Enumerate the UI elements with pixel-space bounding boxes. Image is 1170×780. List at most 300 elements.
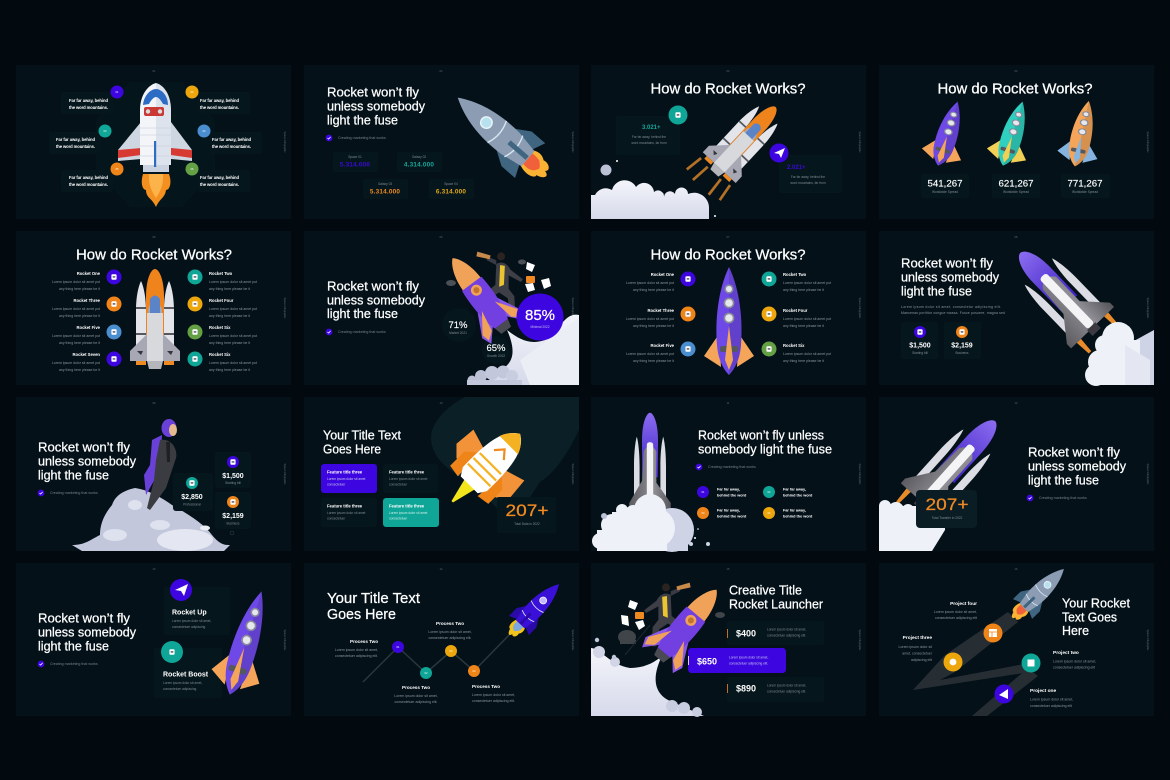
checklist item xyxy=(326,135,386,141)
stat card: 207+ xyxy=(916,490,977,528)
stat cards: Business xyxy=(227,522,240,526)
project labels: Lorem ipsum dolor sit amet, xyxy=(1053,660,1096,664)
stat card: 207+: Total Data in 2022 xyxy=(514,522,540,526)
illustration: man on rocket xyxy=(433,244,551,346)
panel: slide 9 astronaut on cloud xyxy=(16,397,291,551)
price row: $650: Lorem ipsum dolor sit amet, xyxy=(729,656,768,660)
title: Rocket Launcher xyxy=(729,596,824,612)
project labels: Lorem ipsum dolor sit xyxy=(899,645,932,649)
body text xyxy=(901,305,1005,315)
stat cards xyxy=(173,452,251,535)
number badges: 01 xyxy=(116,90,119,94)
stat cards xyxy=(921,174,1110,198)
process nodes: 01 xyxy=(397,645,400,649)
numbered list: Far far away, xyxy=(717,488,740,492)
panel: slide 10 feature cards and orange rocket xyxy=(304,397,579,551)
stat cards: $2,159 xyxy=(222,513,244,520)
info cards: the word mountains. xyxy=(56,144,95,149)
panel: slide 9 astronaut on cloud: Space Infographic xyxy=(283,464,287,485)
stat: 71%: Market 2021 xyxy=(449,331,467,335)
stat cards: Space 04 xyxy=(444,182,458,186)
stat cards: Business xyxy=(956,351,969,355)
price row: $890: $890 xyxy=(736,684,756,694)
panel: slide 13 rocket up and rocket boost xyxy=(16,563,291,716)
card: rocket boost: Lorem ipsum dolor sit amet, xyxy=(163,681,202,685)
title: Rocket won’t fly xyxy=(38,440,130,454)
number badges: 03 xyxy=(104,129,107,133)
number badges: 02 xyxy=(191,90,194,94)
info cards: the word mountains. xyxy=(69,182,108,187)
illustration: grey rocket xyxy=(443,80,562,193)
numbered list: behind the word xyxy=(783,514,813,518)
stat: 71%: 71% xyxy=(448,320,468,331)
panel: slide 6 percentages with man on rocket xyxy=(304,231,579,385)
stat cards: $1,500 xyxy=(222,473,244,480)
title: Your Rocket xyxy=(1062,596,1130,610)
left feature list xyxy=(626,272,696,363)
title: Goes Here xyxy=(323,442,381,456)
left feature list: Lorem ipsum dolor sit amet put xyxy=(52,280,100,284)
panel: slide 8 shuttle launch with stats xyxy=(879,231,1154,386)
process nodes xyxy=(392,641,480,679)
process nodes: 02 xyxy=(425,671,428,675)
stat cards: Galaxy 02 xyxy=(412,155,426,159)
panel: slide 5 shuttle parts list: 05 xyxy=(153,235,156,239)
price row: $400: consectetuer adipiscing elit. xyxy=(767,634,806,638)
price row: $650: consectetuer adipiscing elit. xyxy=(729,662,768,666)
card: rocket up: consectetuer adipiscing xyxy=(172,625,206,629)
process labels: consectetuer adipiscing elit. xyxy=(472,699,515,703)
info cards: Far far away, behind xyxy=(200,175,239,180)
panel: slide 1 shuttle overview: Space Infographic xyxy=(283,132,287,153)
stat cards: 5.314.000 xyxy=(340,162,370,168)
body text: Lorem ipsum dolor sit amet, consectetur adipiscing elit. xyxy=(901,305,1001,309)
left feature list: Lorem ipsum dolor sit amet put xyxy=(626,281,674,285)
title: How do Rocket Works? xyxy=(76,246,232,264)
stat cards: 541,267 xyxy=(928,178,962,190)
process labels: Process Two xyxy=(402,685,430,690)
checklist item xyxy=(326,329,386,335)
stat: 71% xyxy=(442,308,476,342)
stat cards: Professional xyxy=(183,502,201,506)
illustration: tilted shuttle xyxy=(684,92,792,203)
right feature list: Rocket Four xyxy=(209,298,234,303)
illustration: smoke cloud xyxy=(592,494,710,552)
title: light the fuse xyxy=(327,112,398,128)
project labels: Project two xyxy=(1053,650,1079,656)
stat cards: 4.314.000 xyxy=(404,162,434,168)
title: How do Rocket Works? xyxy=(938,80,1092,98)
stat cards: Starting bill xyxy=(912,351,928,355)
project labels: Project four xyxy=(950,601,977,607)
info cards: the word mountains. xyxy=(69,105,108,110)
stat cards: 6.314.000 xyxy=(436,188,466,196)
panel: slide 11 shuttle with numbered list: Space Infographic xyxy=(858,464,862,485)
panel: slide 15 pricing with rocket launcher: 15 xyxy=(727,567,730,571)
illustration: orange tank shuttle xyxy=(130,269,180,369)
panel: slide 8 shuttle launch with stats: 08 xyxy=(1015,235,1018,239)
stat: 85%: Minimal 2022 xyxy=(531,325,550,329)
right feature list: Lorem ipsum dolor sit amet put xyxy=(209,334,257,338)
title: Goes Here xyxy=(327,606,396,623)
title: Here xyxy=(1062,623,1089,638)
feature cards xyxy=(321,464,439,527)
feature cards: Lorem ipsum dolor sit amet xyxy=(389,511,428,515)
price row: $650: $650 xyxy=(697,656,717,666)
panel: slide 7 purple rocket list: 07 xyxy=(727,235,730,239)
illustration: upright purple shuttle xyxy=(629,413,671,523)
title: Rocket won’t fly xyxy=(901,256,993,270)
panel: slide 5 shuttle parts list xyxy=(16,231,291,385)
title: unless somebody xyxy=(901,270,999,284)
feature cards: Feature title three xyxy=(327,504,363,508)
numbered list: 02 xyxy=(768,490,771,494)
right feature list: Lorem ipsum dolor sit amet put xyxy=(783,352,831,356)
panel: slide 16 project roadmap xyxy=(879,559,1154,716)
info cards: Far far away, behind xyxy=(212,137,251,142)
title: Rocket won’t fly xyxy=(1028,444,1120,460)
left feature list: any thing here please be it xyxy=(59,368,100,372)
card: 2.021+: word mountains, far from xyxy=(790,181,826,185)
info cards: Far far away, behind xyxy=(69,175,108,180)
price row: $400: Lorem ipsum dolor sit amet, xyxy=(767,628,806,632)
project labels xyxy=(899,601,1096,708)
title: light the fuse xyxy=(901,284,972,298)
stat card: 207+ xyxy=(497,497,556,533)
panel: slide 6 percentages with man on rocket: Space Infographic xyxy=(571,298,575,319)
stat cards: Space 01 xyxy=(348,155,362,159)
process labels: Lorem ipsum dolor sit amet, xyxy=(472,693,515,697)
panel: slide 5 shuttle parts list: Space Infographic xyxy=(283,298,287,319)
right feature list: any thing here please be it xyxy=(783,359,824,363)
panel: slide 11 shuttle with numbered list: 11 xyxy=(727,401,730,405)
panel: slide 10 feature cards and orange rocket: Space Infographic xyxy=(571,464,575,485)
stat card: 207+: 207+ xyxy=(926,495,969,514)
card: rocket up: Lorem ipsum dolor sit amet, xyxy=(172,619,211,623)
title: Text Goes xyxy=(1062,610,1117,624)
left feature list: Rocket One xyxy=(77,271,101,276)
panel: slide 9 astronaut on cloud: 09 xyxy=(153,401,156,405)
right feature list: any thing here please be it xyxy=(783,288,824,292)
panel: slide 7 purple rocket list: Space Infographic xyxy=(858,298,862,319)
feature cards: Feature title three xyxy=(389,504,425,508)
illustration: smoke cloud xyxy=(1085,322,1154,386)
process labels: Lorem ipsum dolor sit amet, xyxy=(428,630,472,634)
left feature list: Rocket Seven xyxy=(73,352,100,357)
stat cards: Worldwide Spread xyxy=(1003,190,1029,194)
checklist item xyxy=(1027,495,1087,501)
right feature list xyxy=(762,272,831,363)
process labels: Process Two xyxy=(350,639,378,644)
left feature list xyxy=(52,270,122,372)
panel: slide 4 three rockets: 04 xyxy=(1015,69,1018,73)
left feature list: Rocket Three xyxy=(73,298,101,303)
panel: slide 4 three rockets: Space Infographic xyxy=(1146,132,1150,153)
title: light the fuse xyxy=(38,468,109,482)
project nodes xyxy=(944,624,1040,704)
stat cards: 5.314.000 xyxy=(370,188,400,196)
right feature list xyxy=(188,270,257,372)
stat cards xyxy=(901,322,981,359)
illustration: smoke trail xyxy=(467,315,579,385)
title: Creative Title xyxy=(729,582,802,598)
title: unless somebody xyxy=(38,624,136,640)
panel: slide 15 pricing with rocket launcher: Space Infographic xyxy=(858,630,862,651)
checklist item xyxy=(38,661,98,667)
process path xyxy=(363,632,512,682)
info cards: the word mountains. xyxy=(200,105,239,110)
card: 2.021+ xyxy=(770,144,842,193)
card: 2.021+: Far far away, behind the xyxy=(791,175,825,179)
panel: slide 16 project roadmap: Space Infographic xyxy=(1146,630,1150,651)
stat cards: Worldwide Spread xyxy=(932,190,958,194)
panel: slide 11 shuttle with numbered list xyxy=(591,397,866,552)
project labels: Project three xyxy=(903,635,932,641)
illustration: orange white rocket xyxy=(425,407,547,529)
feature cards: consectetuer xyxy=(327,516,346,520)
title: light the fuse xyxy=(327,306,398,321)
panel: slide 3 how rockets work: Space Infographic xyxy=(858,132,862,153)
right feature list: Lorem ipsum dolor sit amet put xyxy=(209,280,257,284)
numbered list: Far far away, xyxy=(717,508,740,512)
numbered list: Far far away, xyxy=(783,488,806,492)
illustration: smoke mound xyxy=(72,488,230,551)
right feature list: any thing here please be it xyxy=(209,314,250,318)
stat: 85% xyxy=(516,294,564,340)
right feature list: Rocket Six xyxy=(209,325,231,330)
stat cards: $2,850 xyxy=(181,494,203,501)
panel: slide 2 rocket title and stats: Space Infographic xyxy=(571,132,575,153)
feature cards: consectetuer xyxy=(389,516,408,520)
price row: $890: consectetuer adipiscing elit. xyxy=(767,690,806,694)
illustration: purple shuttle xyxy=(999,232,1125,360)
feature cards: Lorem ipsum dolor sit amet xyxy=(389,477,428,481)
process labels: Process Two xyxy=(436,621,464,626)
project labels: consectetuer adipiscing elit xyxy=(1030,704,1072,708)
illustration: blue rocket xyxy=(500,575,569,645)
project labels: Lorem ipsum dolor sit amet, xyxy=(934,610,977,614)
card: 2.021+: 2.021+ xyxy=(787,165,806,171)
title: light the fuse xyxy=(38,638,109,654)
right feature list: Rocket Six xyxy=(209,352,231,357)
number badges: 06 xyxy=(191,167,194,171)
number badges: 05 xyxy=(116,167,119,171)
stat cards: Galaxy 03 xyxy=(378,182,392,186)
illustration: orange rocket xyxy=(1055,97,1109,171)
panel: slide 13 rocket up and rocket boost: 13 xyxy=(153,567,156,571)
right feature list: Lorem ipsum dolor sit amet put xyxy=(783,281,831,285)
checklist item xyxy=(696,464,756,470)
info cards: the word mountains. xyxy=(212,144,251,149)
left feature list: Lorem ipsum dolor sit amet put xyxy=(52,307,100,311)
card: rocket up xyxy=(164,579,230,635)
right feature list: Lorem ipsum dolor sit amet put xyxy=(209,361,257,365)
stat: 65% xyxy=(482,336,510,364)
process labels xyxy=(335,621,515,704)
right feature list: Rocket Six xyxy=(783,343,805,348)
left feature list: Lorem ipsum dolor sit amet put xyxy=(52,334,100,338)
title: How do Rocket Works? xyxy=(650,80,806,98)
panel: slide 16 project roadmap: 16 xyxy=(1015,567,1018,571)
illustration: tilted purple shuttle xyxy=(890,402,1016,534)
title: Rocket won’t fly unless xyxy=(698,428,824,442)
panel: slide 12 tilted shuttle with stat: Space Infographic xyxy=(1146,464,1150,485)
checklist item: Creating marketing that works xyxy=(708,465,756,469)
stat cards xyxy=(333,152,474,199)
left feature list: any thing here please be it xyxy=(59,287,100,291)
illustration: man on rocket xyxy=(618,574,735,676)
left feature list: any thing here please be it xyxy=(59,341,100,345)
left feature list: any thing here please be it xyxy=(633,324,674,328)
panel: slide 12 tilted shuttle with stat xyxy=(879,397,1154,551)
roadmap path xyxy=(913,612,1038,716)
illustration: smoke cloud xyxy=(879,500,945,551)
stat card: 207+: Total Transfer in 2022 xyxy=(932,516,963,520)
process labels: Process Two xyxy=(472,684,500,689)
info cards: the word mountains. xyxy=(200,182,239,187)
panel: slide 4 three rockets xyxy=(879,65,1154,219)
left feature list: Rocket Five xyxy=(76,325,101,330)
panel: slide 8 shuttle launch with stats: Space Infographic xyxy=(1146,298,1150,319)
title: Your Title Text xyxy=(323,428,401,442)
left feature list: Lorem ipsum dolor sit amet put xyxy=(626,317,674,321)
price row: $650 xyxy=(688,648,786,673)
process labels: Lorem ipsum dolor sit amet, xyxy=(335,648,378,652)
price row: $400 xyxy=(727,621,824,645)
panel: slide 3 how rockets work: 03 xyxy=(727,69,730,73)
left feature list: Rocket One xyxy=(651,272,675,277)
background rocket silhouette xyxy=(431,397,579,525)
left feature list: Lorem ipsum dolor sit amet put xyxy=(52,361,100,365)
body text: Maecenas porttitor congue massa. Fusce posuere, magna sed xyxy=(901,311,1005,315)
title: Rocket won’t fly xyxy=(327,84,419,100)
numbered list: 01 xyxy=(702,490,705,494)
card: 3.021+ xyxy=(616,106,688,155)
title: unless somebody xyxy=(38,454,136,468)
checklist item: Creating marketing that works xyxy=(338,330,386,334)
left feature list: Rocket Three xyxy=(647,308,675,313)
project labels: adipiscing elit xyxy=(911,658,932,662)
stat: 65%: 65% xyxy=(486,343,506,354)
illustration: purple rocket xyxy=(206,584,285,702)
illustration: smoke cloud xyxy=(591,160,716,219)
numbered list: behind the word xyxy=(717,514,747,518)
right feature list: Rocket Two xyxy=(783,272,807,277)
right feature list: any thing here please be it xyxy=(209,341,250,345)
feature cards: consectetuer xyxy=(389,482,408,486)
title: How do Rocket Works? xyxy=(650,246,806,264)
feature cards: Lorem ipsum dolor sit amet xyxy=(327,477,366,481)
title: unless somebody xyxy=(1028,458,1126,474)
stat cards: Starting bill xyxy=(225,481,241,485)
info cards xyxy=(49,92,262,192)
feature cards: Feature title three xyxy=(389,470,425,474)
illustration: grey rocket xyxy=(1003,559,1073,628)
illustration: purple rocket xyxy=(704,267,754,375)
process labels: consectetuer adipiscing elit. xyxy=(394,700,438,704)
stat cards: 621,267 xyxy=(998,178,1034,190)
left feature list: Rocket Five xyxy=(650,343,675,348)
feature cards: consectetuer xyxy=(327,482,346,486)
panel: slide 2 rocket title and stats: 02 xyxy=(440,69,443,73)
project labels: consectetuer adipiscing elit xyxy=(1053,666,1095,670)
right feature list: Lorem ipsum dolor sit amet put xyxy=(783,317,831,321)
stat cards: $1,500 xyxy=(909,342,931,350)
panel: slide 12 tilted shuttle with stat: 12 xyxy=(1015,401,1018,405)
panel: slide 1 shuttle overview xyxy=(16,65,291,219)
project labels: amet, consectetuer xyxy=(902,652,933,656)
right feature list: Rocket Two xyxy=(209,271,233,276)
process nodes: 03 xyxy=(450,649,453,653)
right feature list: Lorem ipsum dolor sit amet put xyxy=(209,307,257,311)
checklist item: Creating marketing that works xyxy=(338,136,386,140)
card: 3.021+: 3.021+ xyxy=(642,125,661,131)
title: Rocket won’t fly xyxy=(38,610,130,626)
right feature list: any thing here please be it xyxy=(209,287,250,291)
left feature list: any thing here please be it xyxy=(633,359,674,363)
card: 3.021+: Far far away, behind the xyxy=(632,135,666,139)
project labels: consectetuer adipiscing elit xyxy=(935,616,977,620)
feature cards: Lorem ipsum dolor sit amet xyxy=(327,511,366,515)
numbered list xyxy=(697,486,813,519)
illustration: smoke trail xyxy=(591,638,704,717)
process labels: Lorem ipsum dolor sit amet, xyxy=(394,694,438,698)
numbered list: behind the word xyxy=(717,494,747,498)
price row: $890: Lorem ipsum dolor sit amet, xyxy=(767,684,806,688)
process labels: consectetuer adipiscing elit. xyxy=(335,654,378,658)
stat card: 207+: 207+ xyxy=(506,501,549,520)
checklist item: Creating marketing that works xyxy=(50,662,98,666)
panel: slide 3 how rockets work xyxy=(591,65,866,219)
card: 3.021+: word mountains, far from xyxy=(631,141,667,145)
stat: 85%: 85% xyxy=(525,307,555,324)
panel: slide 10 feature cards and orange rocket: 10 xyxy=(440,401,443,405)
left feature list: any thing here please be it xyxy=(633,288,674,292)
title: light the fuse xyxy=(1028,472,1099,488)
title: Your Title Text xyxy=(327,590,421,607)
panel: slide 2 rocket title and stats xyxy=(304,65,579,219)
panel: slide 13 rocket up and rocket boost: Space Infographic xyxy=(283,630,287,651)
price row: $890 xyxy=(727,677,824,702)
panel: slide 15 pricing with rocket launcher xyxy=(591,563,866,717)
right feature list: any thing here please be it xyxy=(783,324,824,328)
title: unless somebody xyxy=(327,292,425,308)
title: Rocket won’t fly xyxy=(327,278,419,294)
title: somebody light the fuse xyxy=(698,442,832,456)
panel: slide 1 shuttle overview: 01 xyxy=(153,69,156,73)
checklist item: Creating marketing that works xyxy=(50,491,98,495)
panel: slide 14 process timeline: Space Infographic xyxy=(571,630,575,651)
price row: $400: $400 xyxy=(736,628,756,638)
project labels: Project one xyxy=(1030,688,1056,694)
number badges xyxy=(98,86,210,176)
panel: slide 14 process timeline xyxy=(304,563,579,716)
info cards: Far far away, behind xyxy=(200,98,239,103)
stat cards: 771,267 xyxy=(1068,178,1102,190)
illustration: purple rocket xyxy=(918,96,977,172)
checklist item xyxy=(38,490,98,496)
checklist item: Creating marketing that works xyxy=(1039,496,1087,500)
illustration: astronaut xyxy=(144,419,177,510)
process nodes: 04 xyxy=(473,669,476,673)
panel: slide 14 process timeline: 14 xyxy=(440,567,443,571)
card: rocket up: Rocket Up xyxy=(172,610,207,616)
process labels: consectetuer adipiscing elit. xyxy=(428,636,472,640)
info cards: Far far away, behind xyxy=(56,137,95,142)
illustration: teal rocket xyxy=(983,96,1042,172)
panel: slide 6 percentages with man on rocket: 06 xyxy=(440,235,443,239)
number badges: 04 xyxy=(203,129,206,133)
